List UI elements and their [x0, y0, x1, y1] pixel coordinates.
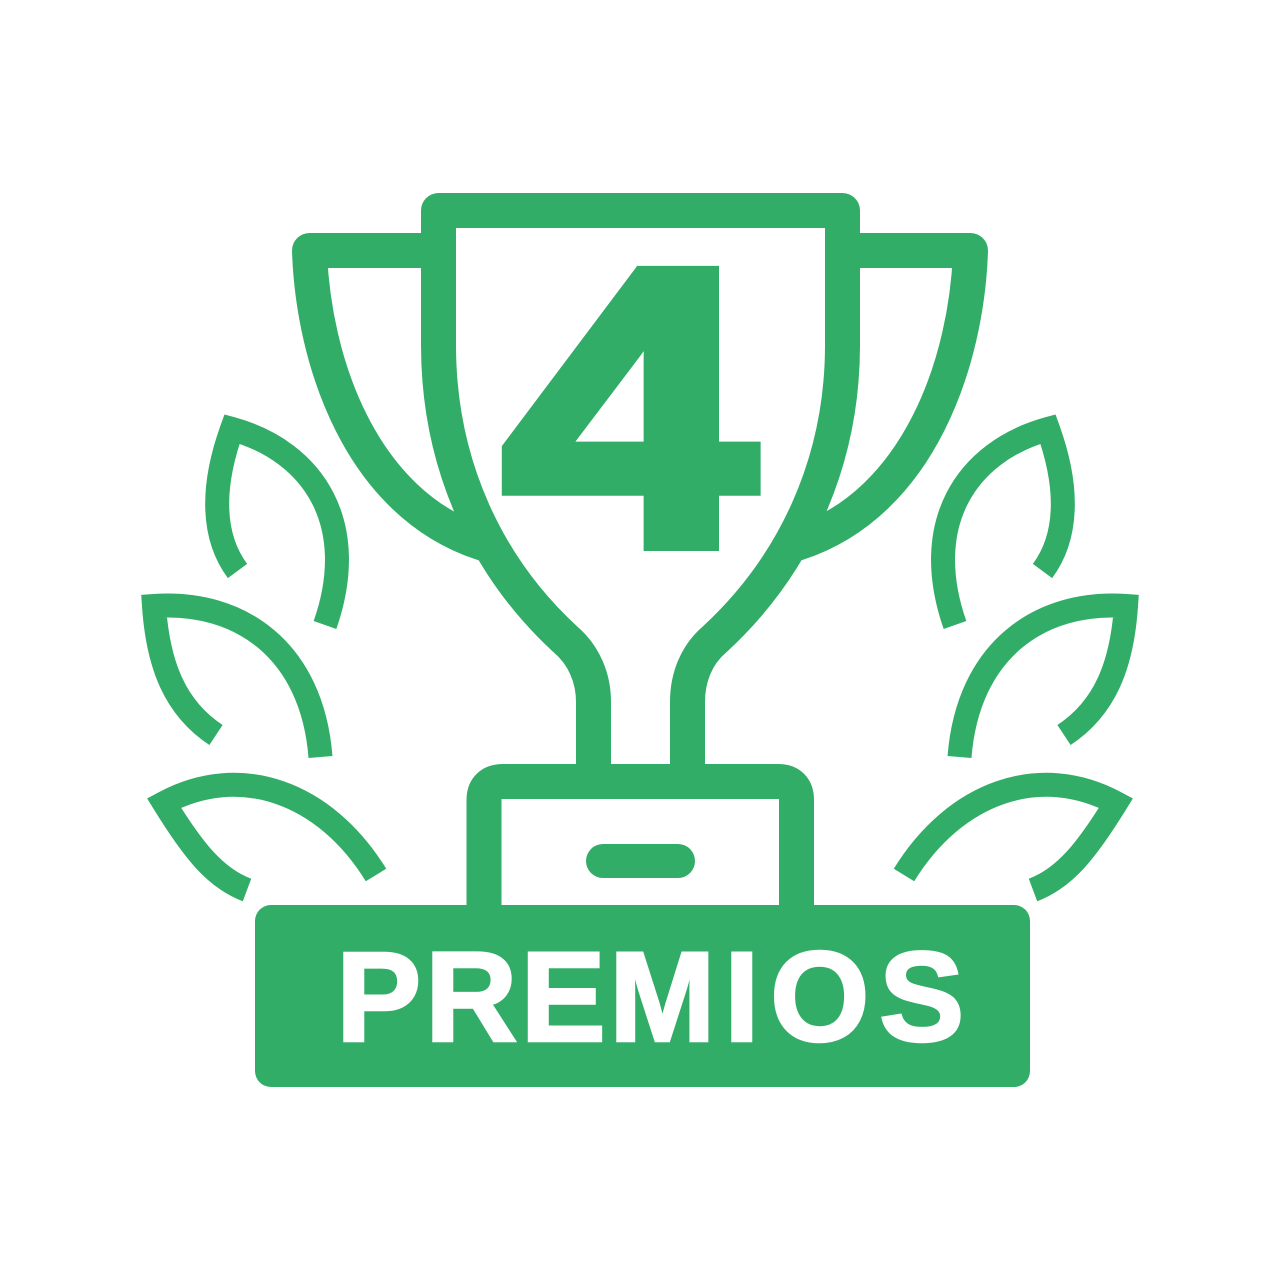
- icon: trophy cup and stem: [438, 210, 842, 775]
- banner: [255, 905, 1030, 1087]
- banner label: PREMIOS: PREMIOS: [336, 926, 964, 1069]
- left laurel leaves: [154, 429, 376, 890]
- right laurel leaves: [904, 429, 1126, 890]
- icon: right trophy handle: [785, 250, 970, 547]
- icon: left trophy handle: [310, 250, 495, 547]
- number 4: 4: [503, 188, 758, 628]
- icon: trophy base: [484, 782, 796, 915]
